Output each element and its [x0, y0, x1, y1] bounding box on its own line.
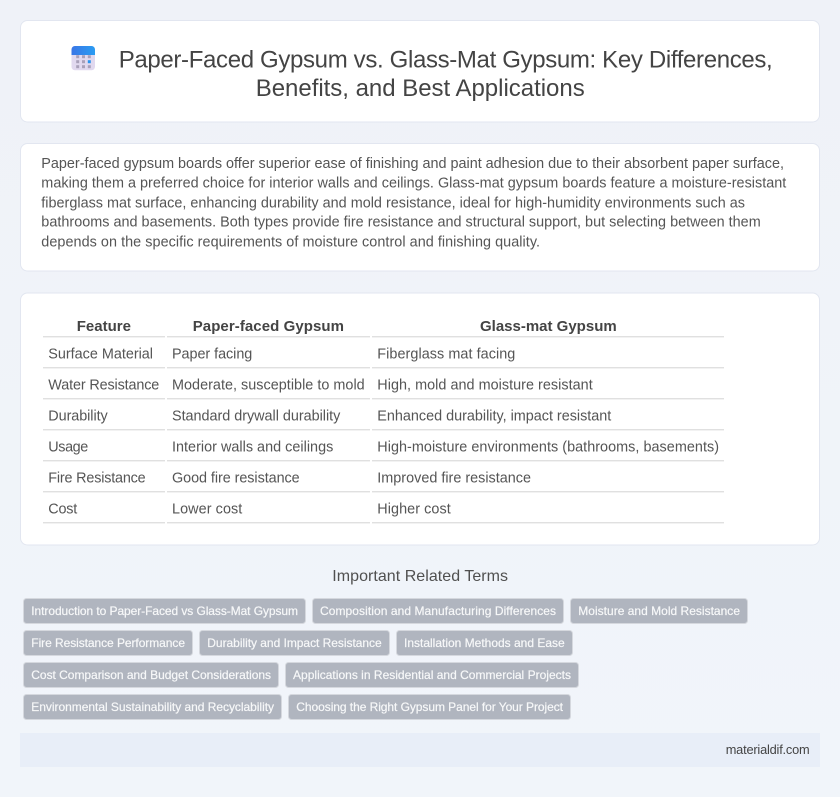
table header row: Glass-mat Gypsum [480, 318, 617, 335]
tag: environmental [24, 694, 282, 720]
title: Benefits, and Best Applications [256, 75, 585, 102]
row: usage: High-moisture environments (bathrooms, basements) [377, 439, 719, 455]
panel: header [20, 20, 820, 122]
row: fire resistance [43, 470, 724, 492]
text block: summary: bathrooms and basements. Both types provide fire resistance and structural support, but selecting between them [41, 214, 761, 230]
tag: durability [200, 630, 390, 656]
table header row: Paper-faced Gypsum [193, 318, 344, 335]
heading: important related terms: Important Related Terms [332, 568, 508, 585]
text block: summary [41, 156, 786, 250]
tag: durability: Durability and Impact Resistance [207, 636, 382, 650]
title: Paper-Faced Gypsum vs. Glass-Mat Gypsum: Key Differences, [119, 46, 773, 74]
text block: summary: Paper-faced gypsum boards offer superior ease of finishing and paint adhesion due to their absorbent paper surface, [41, 156, 784, 172]
title [119, 46, 773, 102]
panel: summary paragraph [20, 144, 820, 271]
tag: introduction [24, 598, 306, 624]
row: usage: Usage [48, 439, 88, 455]
row: durability [43, 408, 724, 430]
tag: applications [286, 662, 578, 688]
row: usage: Interior walls and ceilings [172, 439, 333, 455]
text block: summary: making them a preferred choice for interior walls and ceilings. Glass-mat gypsum boards feature a moisture-resistant [41, 176, 786, 192]
icon: calendar [72, 46, 95, 70]
tag: moisture [570, 598, 748, 624]
row: water resistance: High, mold and moisture resistant [377, 377, 593, 393]
row: surface material: Fiberglass mat facing [377, 346, 515, 362]
tag: environmental: Environmental Sustainability and Recyclability [31, 700, 274, 714]
row: cost: Cost [48, 501, 77, 517]
panel: comparison table [20, 293, 820, 545]
row: fire resistance: Good fire resistance [172, 470, 300, 486]
text block: summary: fiberglass mat surface, enhancing durability and mold resistance, ideal for high-humidity environments such as [41, 195, 745, 211]
tag: composition: Composition and Manufacturing Differences [320, 604, 556, 618]
text block: summary: depends on the specific requirements of moisture control and finishing quality. [41, 234, 540, 250]
row: usage [43, 439, 724, 461]
row: durability: Enhanced durability, impact resistant [377, 408, 611, 424]
tag: cost: Cost Comparison and Budget Considerations [31, 668, 271, 682]
tag: installation: Installation Methods and Ease [404, 636, 565, 650]
tag: installation [396, 630, 572, 656]
footer [20, 733, 820, 767]
row: cost: Lower cost [172, 501, 242, 517]
row: surface material: Surface Material [48, 346, 153, 362]
row: water resistance: Water Resistance [48, 377, 159, 393]
row: fire resistance: Improved fire resistance [377, 470, 531, 486]
tag: applications: Applications in Residential and Commercial Projects [293, 668, 571, 682]
tag: cost [24, 662, 278, 688]
panel: related term tags [24, 598, 748, 720]
tag: fire: Fire Resistance Performance [31, 636, 185, 650]
tag: choosing: Choosing the Right Gypsum Panel for Your Project [296, 700, 564, 714]
tag: moisture: Moisture and Mold Resistance [578, 604, 740, 618]
row: surface material: Paper facing [172, 346, 252, 362]
row: durability: Standard drywall durability [172, 408, 341, 424]
row: cost: Higher cost [377, 501, 451, 517]
row: fire resistance: Fire Resistance [48, 470, 146, 486]
row: water resistance [43, 377, 724, 399]
tag: introduction: Introduction to Paper-Faced vs Glass-Mat Gypsum [31, 604, 298, 618]
row: durability: Durability [48, 408, 108, 424]
footer: materialdif.com [726, 742, 810, 757]
row: cost [43, 501, 724, 523]
table header row [43, 318, 724, 337]
tag: composition [312, 598, 564, 624]
table header row: Feature [77, 318, 131, 335]
tag: fire [24, 630, 192, 656]
tag: choosing [288, 694, 570, 720]
row: water resistance: Moderate, susceptible to mold [172, 377, 365, 393]
row: surface material [43, 346, 724, 368]
